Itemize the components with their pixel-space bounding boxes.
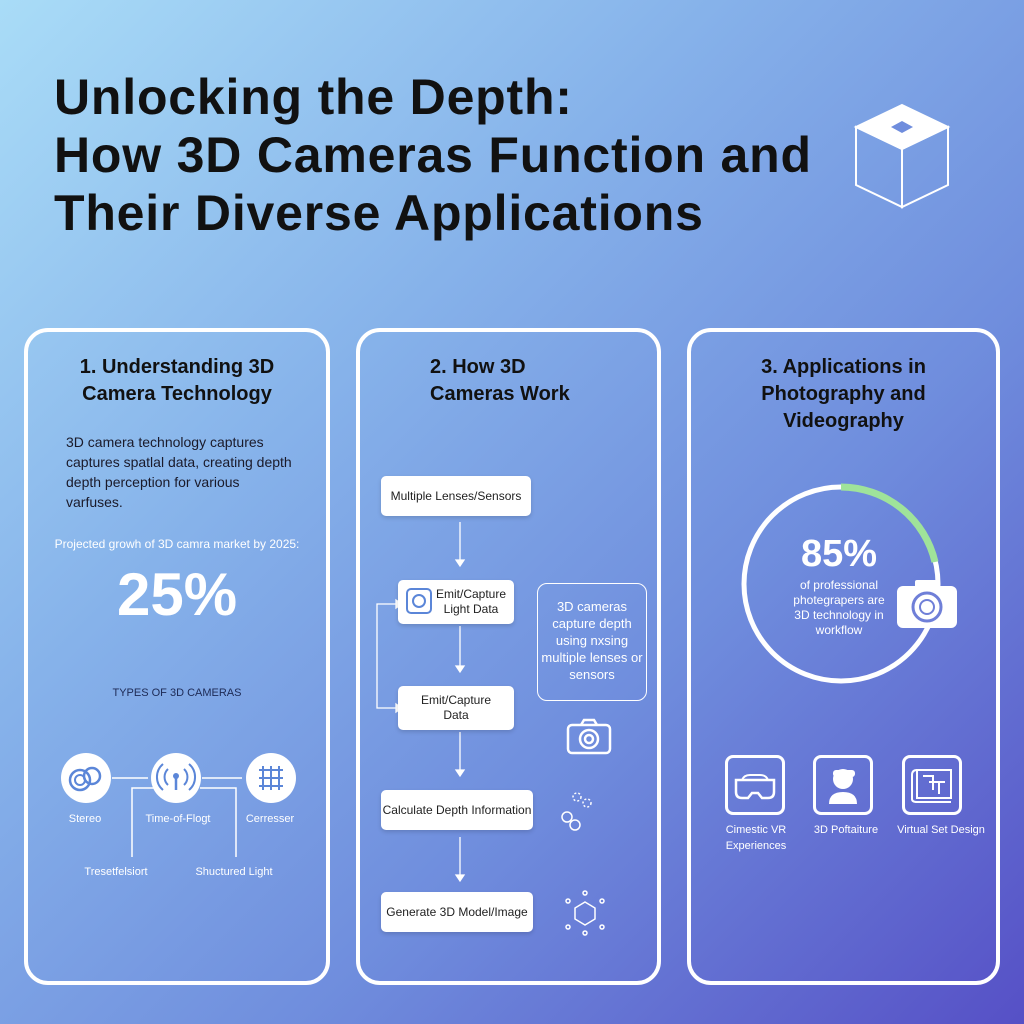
stat label: Projected growh of 3D camra market by 2025: [55,537,299,551]
panel: applications: 3D Poftaiture [814,824,878,836]
title: How 3D Cameras Function and [54,127,812,183]
step 1: Multiple Lenses/Sensors [391,488,521,502]
heading: Photography and [761,383,926,405]
heading [761,356,926,432]
heading: 3. Applications in [761,356,926,378]
icon: camera [566,718,612,754]
subheading: TYPES OF 3D CAMERAS [112,687,241,699]
text block: 3D camera technology captures captures spatlal data, creating depth depth perception for various varfuses. [66,434,292,510]
step 2 [398,580,514,624]
types diagram: Shuctured Light [195,866,273,878]
icon: stereo [61,753,111,803]
stat [793,533,885,637]
types diagram: Tresetfelsiort [84,866,148,878]
heading [430,356,570,405]
step 3: Emit/Capture [421,693,491,707]
title: Unlocking the Depth: [54,69,573,125]
title [54,69,812,241]
types diagram [61,753,296,878]
panel: how it works [356,328,661,985]
stat: of professional [800,578,878,592]
panel: applications: Virtual Set Design [897,824,985,836]
icon: time of flight [151,753,201,803]
step 4: Calculate Depth Information [383,802,531,816]
heading: Camera Technology [82,383,272,405]
stat: photegrapers are [793,593,885,607]
panel: understanding [24,328,330,985]
stat: 3D technology in [794,608,884,622]
heading: Videography [783,410,904,432]
title: Their Diverse Applications [54,185,704,241]
stat: workflow [816,623,862,637]
icon: cube [854,104,950,208]
icon: grid [246,753,296,803]
labels: Cimestic VR [726,824,786,836]
arrows [376,522,466,882]
callout [537,583,647,701]
icon: dots [561,792,592,831]
heading: 1. Understanding 3D [80,356,274,378]
icon: VR [725,755,785,815]
labels [726,824,786,852]
icon: set design [902,755,962,815]
callout: 3D cameras capture depth using nxsing multiple lenses or sensors [541,599,643,682]
step 5: Generate 3D Model/Image [386,904,528,918]
step 3 [398,686,514,730]
stat: 25% [117,561,237,628]
heading: 2. How 3D [430,356,526,378]
types diagram: Time-of-Flogt [146,813,210,825]
icon: portrait [813,755,873,815]
ring chart [742,484,940,684]
step 2: Light Data [444,602,498,616]
step 4 [381,790,533,830]
step 5 [381,892,533,932]
labels: Experiences [726,840,786,852]
step 3: Data [443,708,469,722]
heading [80,356,274,405]
icon: camera [897,580,957,628]
step 1 [381,476,531,516]
step 2: Emit/Capture [436,587,506,601]
icon: molecule [565,890,605,936]
panel: applications [687,328,1000,985]
types diagram: Cerresser [246,813,294,825]
heading: Cameras Work [430,383,570,405]
types diagram: Stereo [69,813,101,825]
stat: 85% [801,533,877,575]
